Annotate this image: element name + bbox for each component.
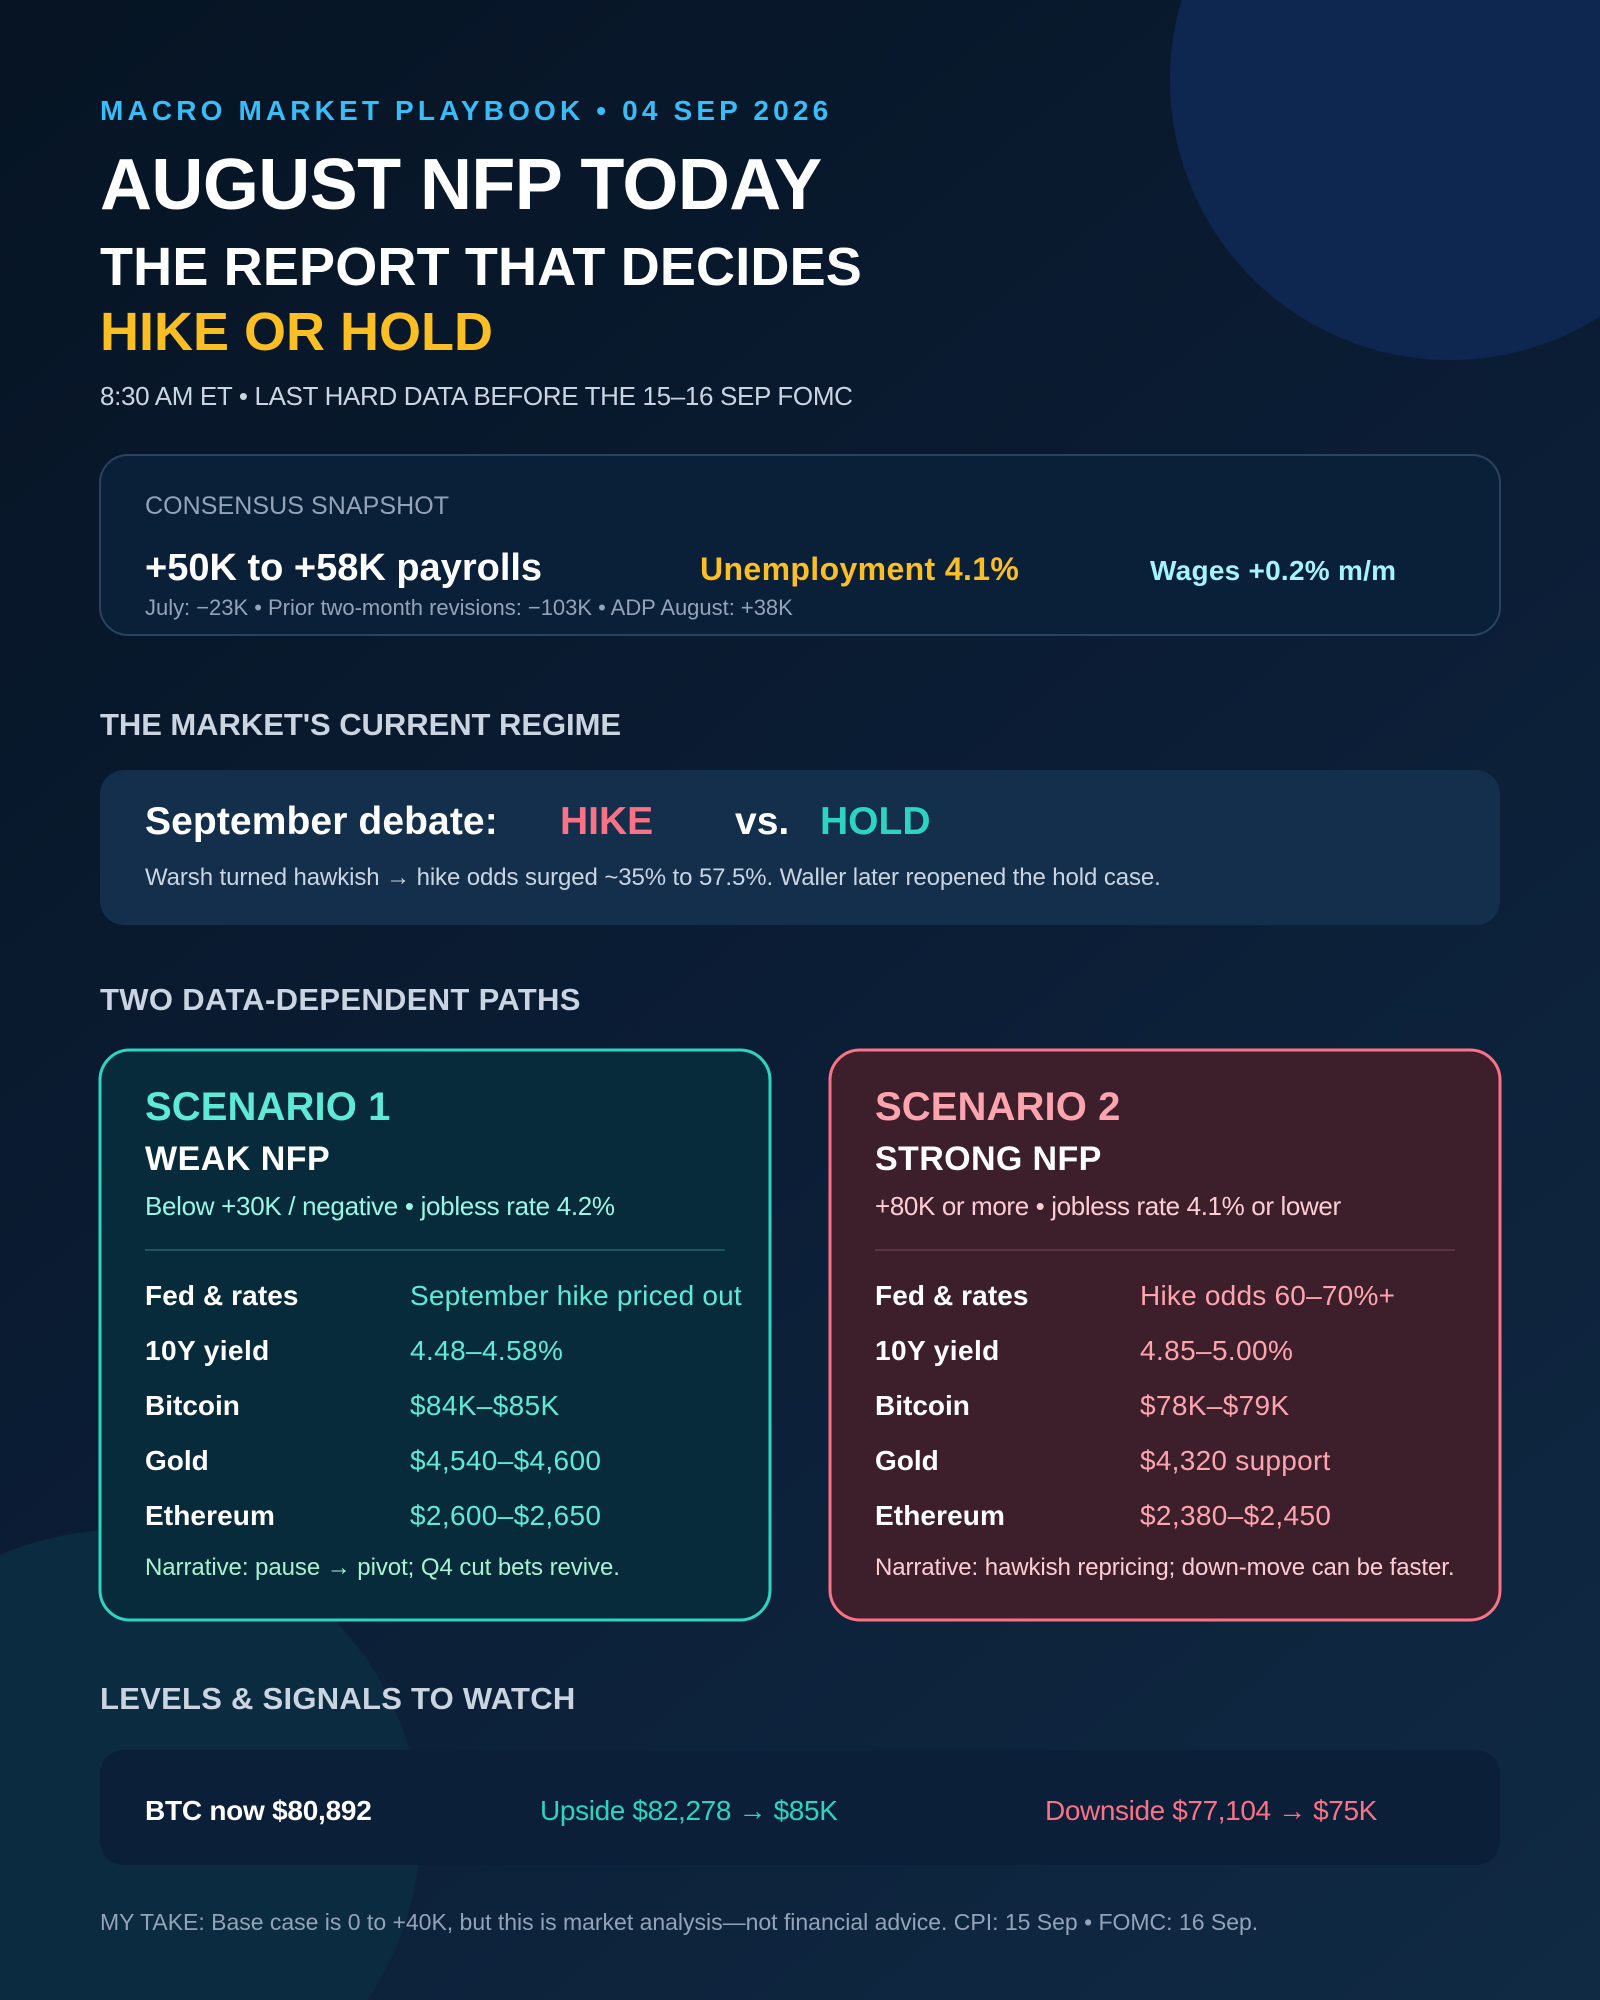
row: Ethereum: Ethereum	[145, 1500, 275, 1531]
row: Bitcoin	[875, 1390, 1290, 1421]
row: Fed and rates: September hike priced out	[410, 1280, 742, 1311]
row: 10Y yield: 10Y yield	[875, 1335, 1000, 1366]
heading: two paths: TWO DATA-DEPENDENT PATHS	[100, 982, 581, 1017]
hike label: HIKE	[560, 800, 653, 843]
row: Gold: Gold	[875, 1445, 939, 1476]
row: Gold: $4,320 support	[1140, 1445, 1331, 1476]
row: Gold: Gold	[145, 1445, 209, 1476]
hold label: HOLD	[820, 800, 930, 843]
subtitle: THE REPORT THAT DECIDES	[100, 237, 862, 297]
downside levels: Downside $77,104 → $75K	[1045, 1795, 1377, 1826]
row: Bitcoin: Bitcoin	[145, 1390, 240, 1421]
row: 10Y yield: 10Y yield	[145, 1335, 270, 1366]
trigger: Below +30K / negative • jobless rate 4.2%	[145, 1191, 615, 1221]
context note: July: −23K • Prior two-month revisions: −103K • ADP August: +38K	[145, 595, 793, 620]
eyebrow: MACRO MARKET PLAYBOOK • 04 SEP 2026	[100, 95, 832, 126]
title: AUGUST NFP TODAY	[100, 145, 822, 225]
label: CONSENSUS SNAPSHOT	[145, 492, 449, 520]
panel: regime debate	[100, 770, 1500, 925]
row: Fed and rates: Hike odds 60–70%+	[1140, 1280, 1395, 1311]
panel: scenario 2	[828, 1048, 1502, 1622]
narrative: Narrative: hawkish repricing; down-move can be faster.	[875, 1554, 1454, 1581]
scenario name: WEAK NFP	[145, 1140, 330, 1178]
timing line: 8:30 AM ET • LAST HARD DATA BEFORE THE 15–16 SEP FOMC	[100, 381, 853, 411]
panel: scenario 1	[98, 1048, 772, 1622]
decorative circle: top right	[1170, 0, 1600, 360]
row: Ethereum	[875, 1500, 1331, 1531]
payrolls figure: +50K to +58K payrolls	[145, 547, 542, 589]
debate label: September debate:	[145, 800, 498, 843]
trigger: +80K or more • jobless rate 4.1% or lower	[875, 1191, 1341, 1221]
unemployment figure: Unemployment 4.1%	[700, 551, 1019, 587]
row: Ethereum: $2,600–$2,650	[410, 1500, 601, 1531]
row: Gold: $4,540–$4,600	[410, 1445, 601, 1476]
row: Bitcoin: Bitcoin	[875, 1390, 970, 1421]
row: Fed and rates: Fed & rates	[875, 1280, 1029, 1311]
BTC price: BTC now $80,892	[145, 1795, 372, 1826]
scenario title: SCENARIO 1	[145, 1085, 390, 1129]
row: Fed and rates	[145, 1280, 742, 1311]
wages figure: Wages +0.2% m/m	[1150, 555, 1396, 586]
row: Bitcoin: $84K–$85K	[410, 1390, 560, 1421]
row: 10Y yield: 4.85–5.00%	[1140, 1335, 1293, 1366]
row: Ethereum	[145, 1500, 601, 1531]
row: Ethereum: Ethereum	[875, 1500, 1005, 1531]
panel: levels	[100, 1750, 1500, 1865]
panel: consensus snapshot	[99, 454, 1501, 636]
row: Ethereum: $2,380–$2,450	[1140, 1500, 1331, 1531]
scenario title: SCENARIO 2	[875, 1085, 1120, 1129]
row: Fed and rates: Fed & rates	[145, 1280, 299, 1311]
row: Gold	[145, 1445, 601, 1476]
debate explanation: Warsh turned hawkish → hike odds surged ~35% to 57.5%. Waller later reopened the hold case.	[145, 864, 1161, 891]
row: Bitcoin: $78K–$79K	[1140, 1390, 1290, 1421]
footer note: MY TAKE: Base case is 0 to +40K, but this is market analysis—not financial advice. CPI: 15 Sep • FOMC: 16 Sep.	[100, 1909, 1258, 1935]
row: Gold	[875, 1445, 1331, 1476]
decorative circle: bottom left	[0, 1530, 420, 2000]
scenario name: STRONG NFP	[875, 1140, 1102, 1178]
row: 10Y yield: 4.48–4.58%	[410, 1335, 563, 1366]
heading: levels: LEVELS & SIGNALS TO WATCH	[100, 1681, 576, 1716]
narrative: Narrative: pause → pivot; Q4 cut bets revive.	[145, 1554, 620, 1581]
row: 10Y yield	[875, 1335, 1293, 1366]
versus: vs.	[735, 800, 789, 843]
row: Fed and rates	[875, 1280, 1395, 1311]
header	[100, 95, 862, 411]
row: 10Y yield	[145, 1335, 563, 1366]
upside levels: Upside $82,278 → $85K	[540, 1795, 838, 1826]
heading: current regime: THE MARKET'S CURRENT REGIME	[100, 707, 621, 742]
highlighted subtitle: HIKE OR HOLD	[100, 302, 493, 362]
row: Bitcoin	[145, 1390, 560, 1421]
